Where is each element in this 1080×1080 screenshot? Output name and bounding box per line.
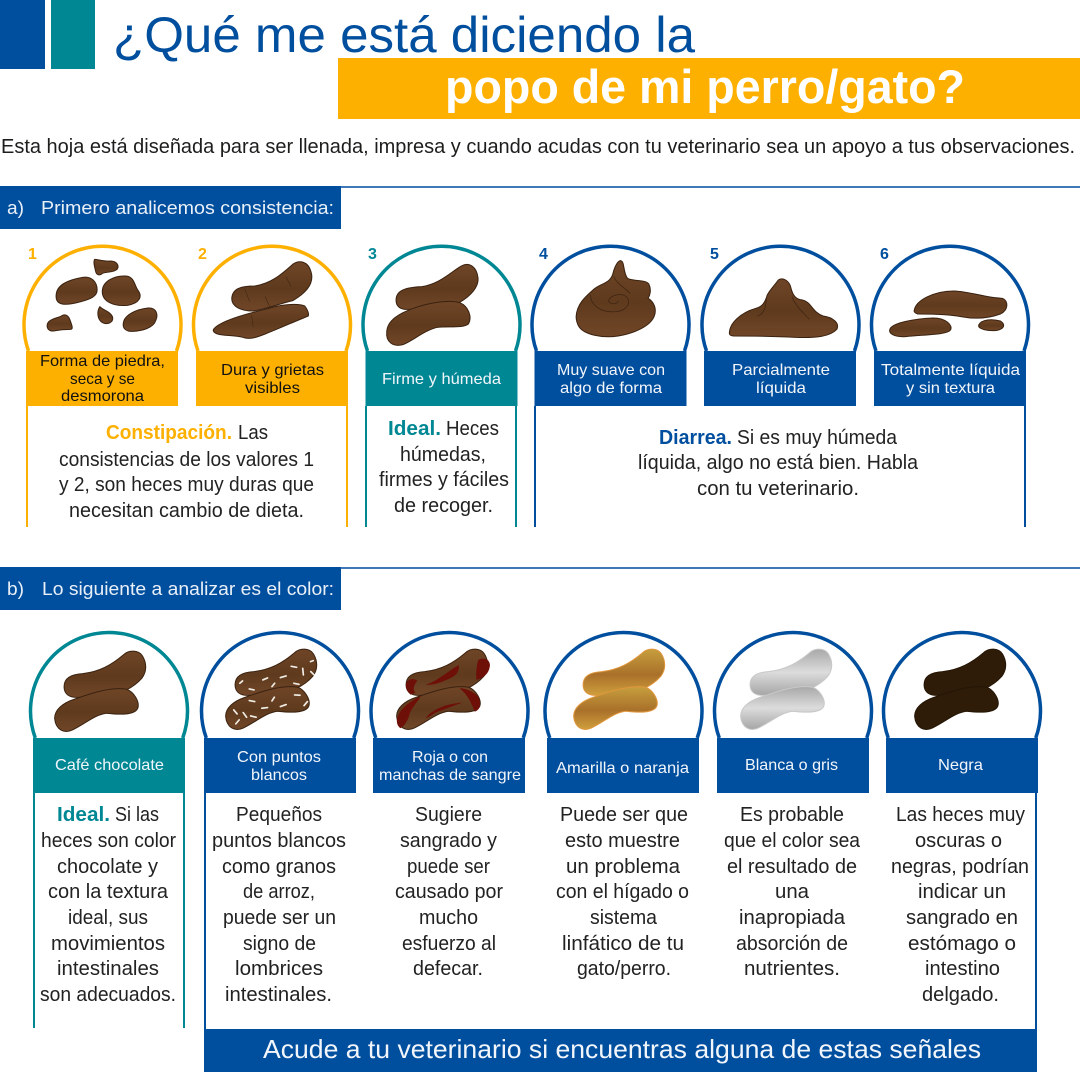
color 2 white spots (202, 632, 359, 793)
text: amarilla: con el hígado o (556, 881, 689, 903)
text: puntos blancos: de arroz, (243, 881, 315, 903)
panel: constipación description: y 2, son heces muy duras que (59, 474, 314, 496)
text: blanca: el resultado de (727, 856, 857, 878)
color 1 chocolate: Café chocolate (55, 757, 164, 774)
text: roja: causado por (395, 881, 503, 903)
consistency 5 partially liquid: 5 (710, 246, 719, 263)
color 4 yellow (545, 632, 702, 793)
consistency 3 ideal: Firme y húmeda (382, 371, 501, 388)
text: negra (891, 804, 1029, 1006)
color 3 red: manchas de sangre (379, 767, 521, 784)
panel: diarrea description: líquida, algo no está bien. Habla (638, 452, 919, 474)
consistency 1 stones (24, 246, 181, 406)
panel: consistency types (24, 246, 1029, 406)
color 2 white spots: blancos (251, 767, 307, 784)
panel: chocolate description: Ideal. (57, 804, 110, 826)
panel: diarrea description: Diarrea. (659, 427, 732, 449)
title: popo de mi perro/gato? (445, 60, 965, 113)
text: puntos blancos: puede ser un (223, 907, 336, 929)
panel: color types (31, 632, 1041, 793)
color 6 black (884, 632, 1040, 793)
section heading a (0, 186, 1080, 229)
text: amarilla: esto muestre (565, 830, 680, 852)
panel: ideal description: húmedas, (400, 444, 486, 466)
text: roja: puede ser (407, 856, 490, 878)
consistency 6 liquid: Totalmente líquida (881, 362, 1020, 379)
title (113, 7, 1080, 119)
color 6 black: Negra (938, 757, 983, 774)
text: blanca (724, 804, 861, 980)
color 5 white grey: Blanca o gris (745, 757, 838, 774)
color 3 red (371, 632, 528, 793)
panel: diarrea description (535, 406, 1025, 527)
panel: chocolate description: Si las (115, 804, 159, 826)
text: negra: oscuras o (915, 830, 1002, 852)
text: roja: esfuerzo al (402, 933, 496, 955)
text: amarilla: Puede ser que (560, 804, 688, 826)
panel: ideal description (366, 406, 516, 527)
section heading b (0, 567, 1080, 610)
text: amarilla (556, 804, 689, 980)
panel: constipación description: Constipación. (106, 422, 232, 444)
panel: diarrea description: Si es muy húmeda (737, 427, 898, 449)
panel: chocolate description: con la textura (48, 881, 169, 903)
consistency 2 cracked: Dura y grietas (221, 362, 324, 379)
callout banner (204, 1029, 1037, 1072)
text: puntos blancos: como granos (222, 856, 336, 878)
text: negra: estómago o (908, 933, 1016, 955)
text: roja: Sugiere (415, 804, 482, 826)
color 4 yellow: Amarilla o naranja (556, 760, 689, 777)
consistency 4 soft: 4 (539, 246, 548, 263)
text: amarilla: linfático de tu (562, 933, 684, 955)
text: amarilla: sistema (590, 907, 658, 929)
text: blanca: una (775, 881, 810, 903)
section heading b: b) (7, 578, 24, 599)
consistency 2 cracked: visibles (245, 380, 300, 397)
consistency 3 ideal: 3 (368, 246, 377, 263)
text: roja: mucho (419, 907, 478, 929)
panel: chocolate description: son adecuados. (40, 984, 176, 1006)
text: negra: sangrado en (906, 907, 1018, 929)
panel: constipación description (27, 406, 347, 527)
text: roja: sangrado y (400, 830, 497, 852)
consistency 1 stones: Forma de piedra, (40, 353, 165, 370)
text: amarilla: gato/perro. (577, 958, 671, 980)
consistency 5 partially liquid: Parcialmente (732, 362, 830, 379)
panel: constipación description: Las (238, 422, 268, 444)
callout banner: Acude a tu veterinario si encuentras alguna de estas señales (263, 1034, 981, 1064)
text: puntos blancos: signo de (243, 933, 316, 955)
panel: ideal description: de recoger. (394, 495, 493, 517)
text: amarilla: un problema (566, 856, 681, 878)
consistency 6 liquid: y sin textura (906, 380, 995, 397)
section heading a: Primero analicemos consistencia: (41, 197, 334, 218)
panel: chocolate description: chocolate y (57, 856, 158, 878)
consistency 2 cracked: 2 (198, 246, 207, 263)
panel: ideal description: firmes y fáciles (379, 469, 509, 491)
text: blanca: inapropiada (739, 907, 846, 929)
text: puntos blancos: intestinales. (225, 984, 332, 1006)
consistency 4 soft: Muy suave con (557, 362, 665, 379)
text: negra: negras, podrían (891, 856, 1029, 878)
panel: ideal description: Heces (446, 418, 499, 440)
panel: ideal description: Ideal. (388, 418, 441, 440)
color 2 white spots: Con puntos (237, 749, 321, 766)
text: blanca: nutrientes. (744, 958, 840, 980)
text: negra: indicar un (918, 881, 1006, 903)
text: puntos blancos (212, 804, 346, 1006)
panel: chocolate description (34, 793, 184, 1028)
title: ¿Qué me está diciendo la (113, 7, 695, 63)
header squares (0, 0, 95, 69)
section heading b: Lo siguiente a analizar es el color: (42, 578, 334, 599)
text: roja (395, 804, 503, 980)
text: negra: delgado. (922, 984, 999, 1006)
color 5 white grey (714, 632, 872, 793)
consistency 6 liquid (872, 246, 1029, 406)
panel: warning colours descriptions (205, 793, 1036, 1030)
intro text: Esta hoja está diseñada para ser llenada, impresa y cuando acudas con tu veterinario sea un apoyo a tus observaciones. (1, 136, 1075, 158)
panel: constipación description: necesitan cambio de dieta. (69, 500, 304, 522)
text: negra: Las heces muy (896, 804, 1025, 826)
panel: chocolate description: intestinales (57, 958, 159, 980)
color 3 red: Roja o con (412, 749, 488, 766)
consistency 2 cracked (193, 246, 351, 406)
section heading a: a) (7, 197, 24, 218)
consistency 1 stones: 1 (28, 246, 37, 263)
consistency 4 soft: algo de forma (560, 380, 662, 397)
text: roja: defecar. (413, 958, 483, 980)
text: puntos blancos: puntos blancos (212, 830, 346, 852)
text: blanca: que el color sea (724, 830, 861, 852)
panel: constipación description: consistencias de los valores 1 (59, 449, 314, 471)
text: negra: intestino (925, 958, 1000, 980)
consistency 3 ideal (363, 246, 520, 406)
consistency 6 liquid: 6 (880, 246, 889, 263)
panel: chocolate description: heces son color (41, 830, 176, 852)
consistency 1 stones: seca y se (70, 371, 135, 388)
consistency 5 partially liquid (702, 246, 859, 406)
text: puntos blancos: lombrices (235, 958, 323, 980)
text: blanca: Es probable (740, 804, 844, 826)
text: blanca: absorción de (736, 933, 848, 955)
consistency 5 partially liquid: líquida (756, 380, 806, 397)
color 1 chocolate (31, 632, 188, 793)
consistency 1 stones: desmorona (61, 388, 144, 405)
panel: chocolate description: movimientos (51, 933, 165, 955)
text: puntos blancos: Pequeños (236, 804, 322, 826)
consistency 4 soft (532, 246, 689, 406)
panel: chocolate description: ideal, sus (68, 907, 148, 929)
panel: diarrea description: con tu veterinario. (697, 478, 859, 500)
